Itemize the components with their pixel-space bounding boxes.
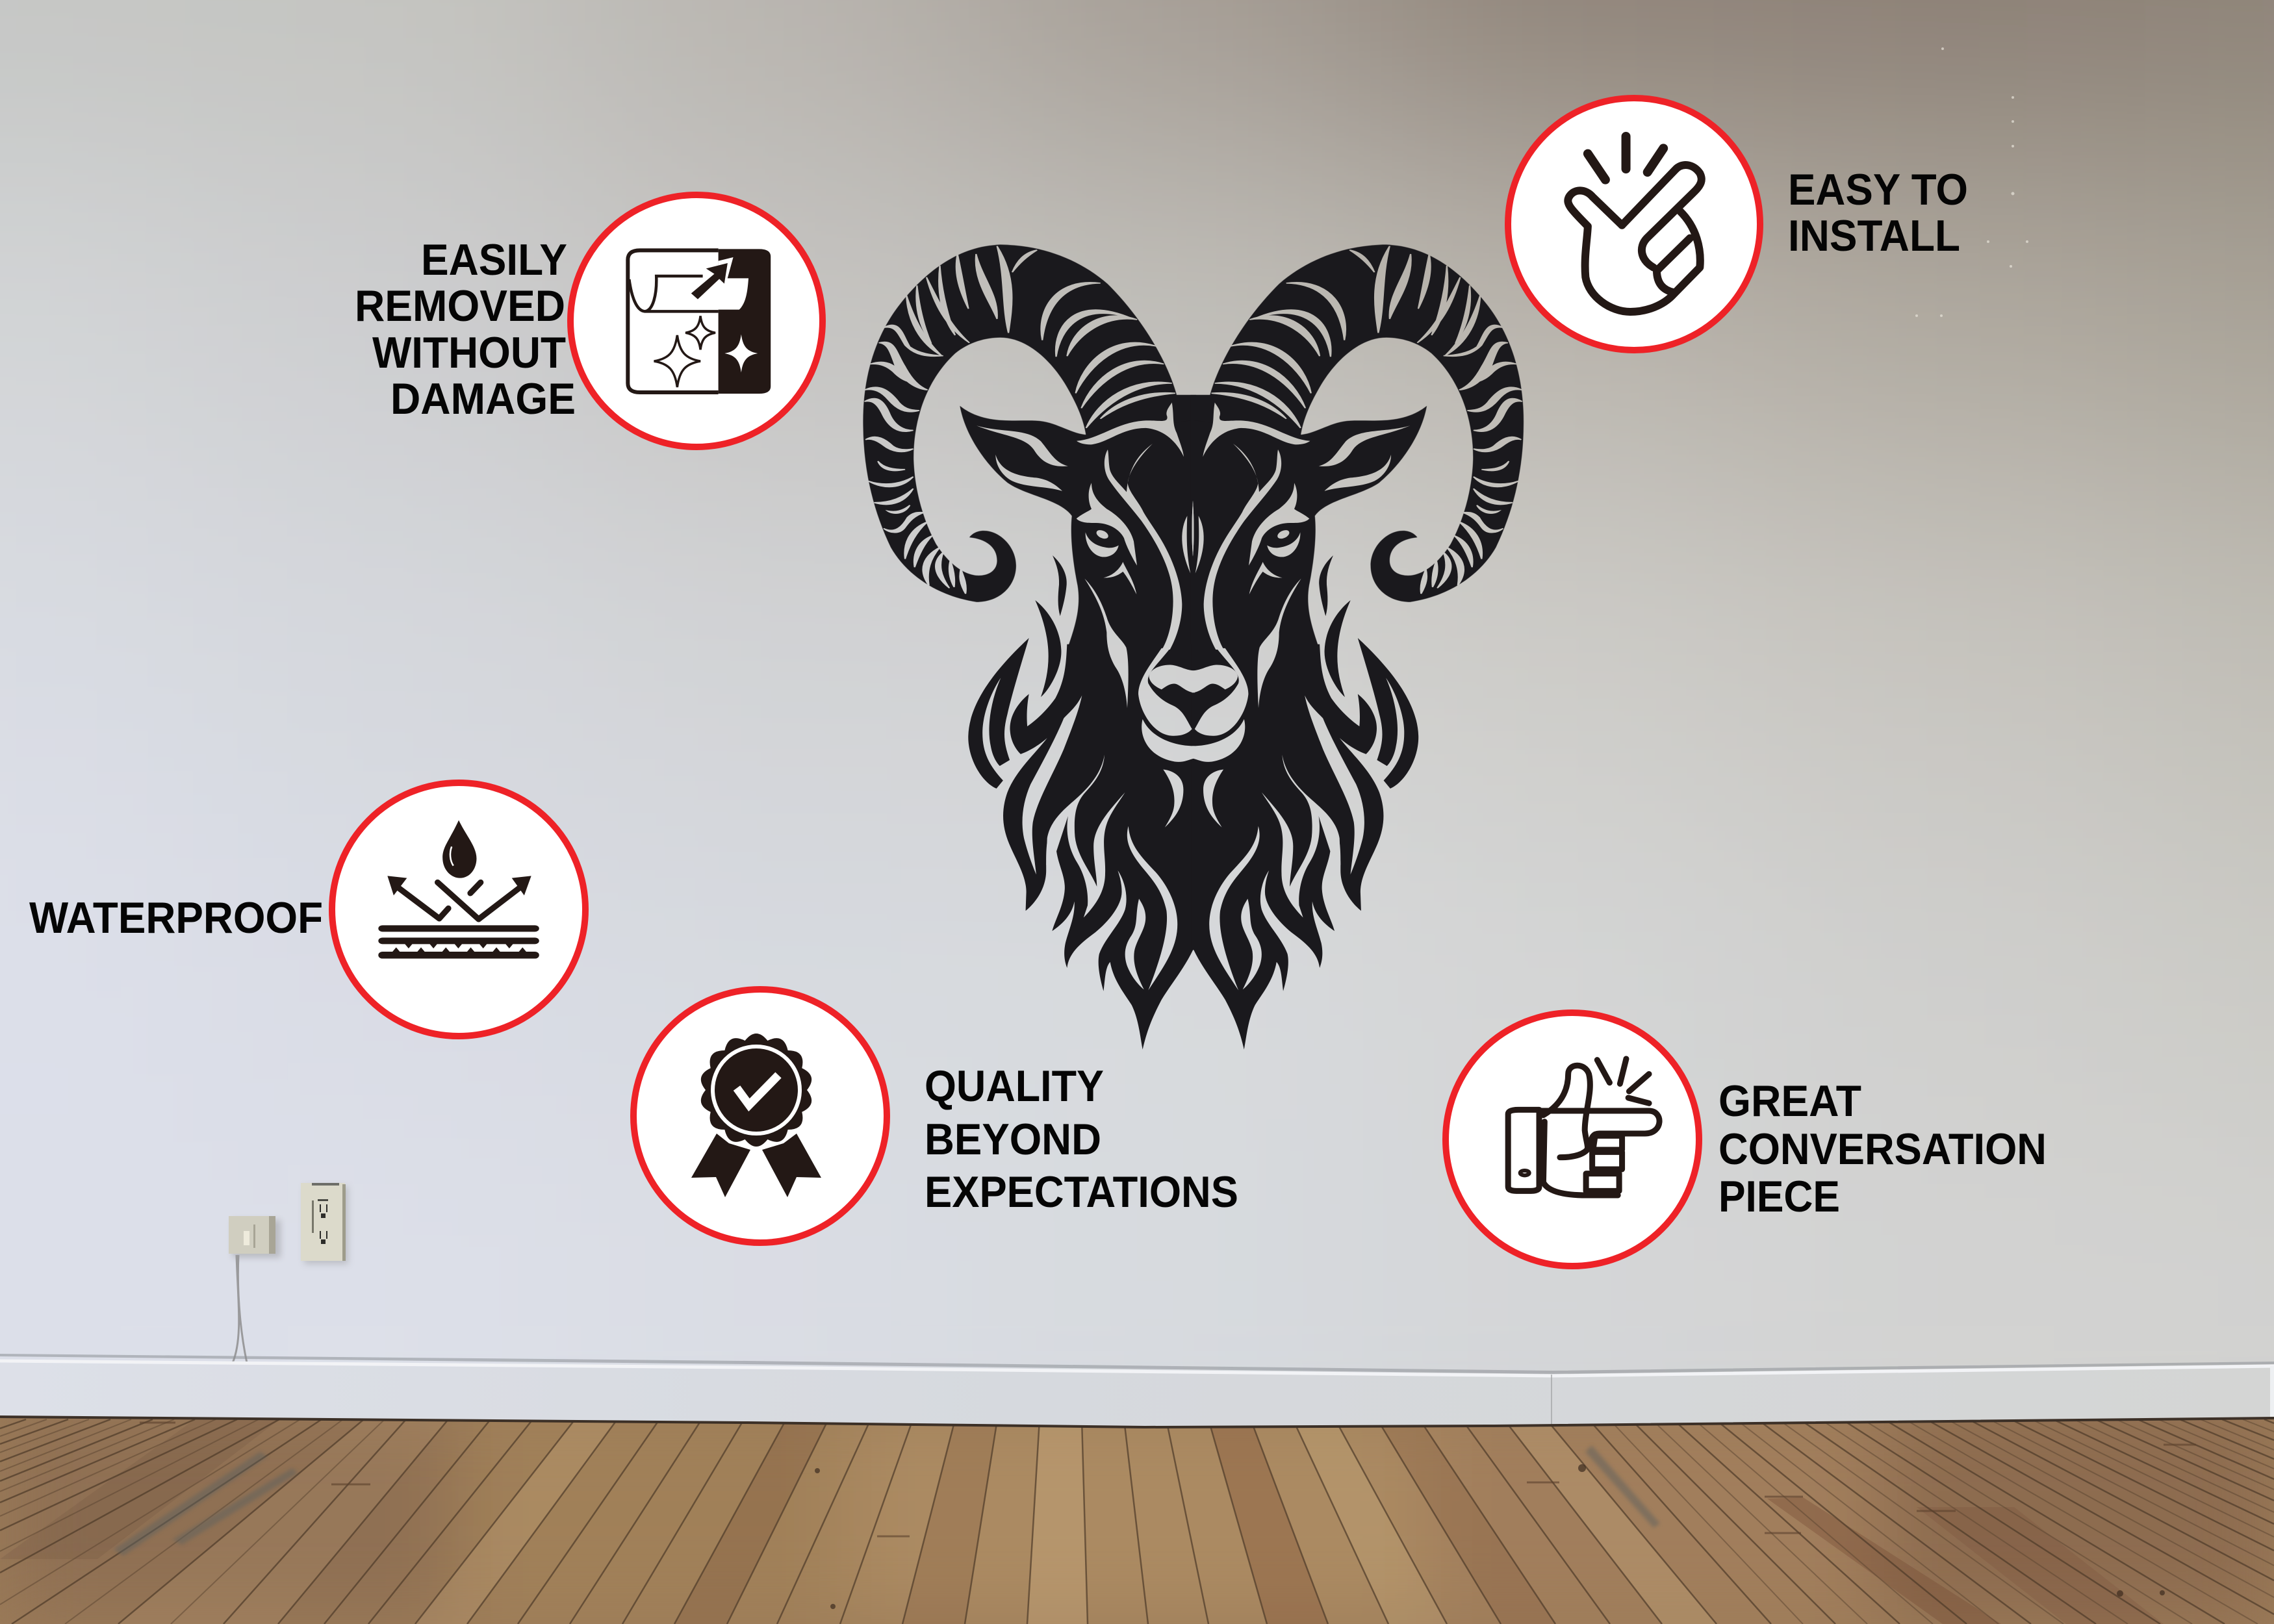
badge ring bbox=[332, 783, 585, 1036]
label: EASILY bbox=[421, 235, 567, 285]
icon: finger snap hand bbox=[1508, 1059, 1659, 1195]
callout: easily removed without damage bbox=[355, 195, 823, 447]
label: INSTALL bbox=[1788, 211, 1960, 260]
label bbox=[1718, 1076, 2047, 1221]
ram side strands bbox=[1035, 555, 1351, 697]
label: GREAT bbox=[1718, 1076, 1861, 1126]
extra fine plank lines bbox=[0, 1419, 2274, 1624]
icon: rosette with check bbox=[691, 1034, 821, 1197]
label: CONVERSATION bbox=[1718, 1124, 2047, 1174]
callout: easy to install bbox=[1508, 98, 1968, 350]
floor plank tints bbox=[0, 1419, 2164, 1624]
baseboard bbox=[0, 1354, 2274, 1429]
badge ring bbox=[1508, 98, 1760, 350]
label: EASY TO bbox=[1788, 165, 1968, 214]
label: BEYOND bbox=[925, 1115, 1101, 1164]
icon: peel off sticker bbox=[628, 249, 771, 394]
wall outlet bbox=[301, 1183, 348, 1264]
badge ring bbox=[570, 195, 823, 447]
ram head decal bbox=[863, 245, 1524, 1050]
label: QUALITY bbox=[925, 1061, 1104, 1111]
label bbox=[925, 1061, 1238, 1217]
label: REMOVED bbox=[355, 281, 565, 331]
floor plank lines bbox=[0, 1419, 2274, 1624]
floor edge shadow bbox=[0, 1417, 2274, 1427]
floor joints and knots bbox=[140, 1423, 2196, 1536]
label: PIECE bbox=[1718, 1172, 1840, 1221]
callout: great conversation piece bbox=[1446, 1013, 2047, 1266]
callout: waterproof bbox=[29, 783, 585, 1036]
callout: quality beyond expectations bbox=[633, 989, 1238, 1243]
icon: water drop on membrane bbox=[378, 820, 539, 959]
floor scuffs bbox=[114, 1445, 1660, 1556]
wooden floor bbox=[0, 1403, 2274, 1624]
ram beard bbox=[968, 638, 1418, 1050]
label bbox=[1788, 165, 1968, 260]
label bbox=[355, 235, 576, 424]
specks on wall bbox=[1915, 47, 2028, 317]
label: WITHOUT bbox=[372, 328, 566, 377]
badge ring bbox=[1446, 1013, 1699, 1266]
power cord bbox=[233, 1255, 247, 1363]
icon: finger snap bbox=[1568, 136, 1702, 312]
light switch box bbox=[229, 1216, 281, 1258]
label: WATERPROOF bbox=[29, 893, 323, 943]
label: EXPECTATIONS bbox=[925, 1167, 1238, 1217]
label: DAMAGE bbox=[390, 374, 576, 424]
ram upper head and horns bbox=[863, 245, 1524, 658]
badge ring bbox=[633, 989, 887, 1243]
